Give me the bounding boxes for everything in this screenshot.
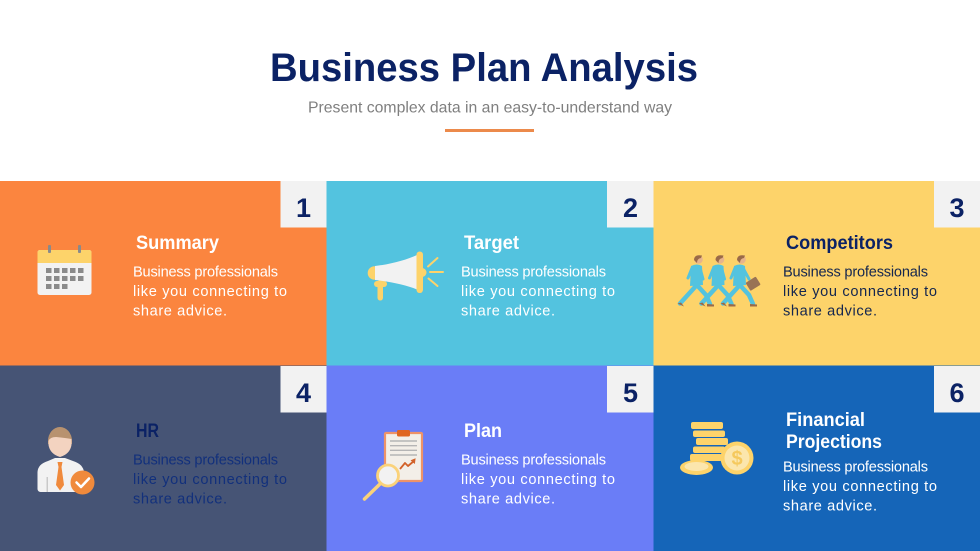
number badge 4: 4	[296, 378, 311, 408]
panel background	[0, 366, 326, 551]
body text	[783, 460, 937, 514]
number badge 1: 1	[296, 193, 311, 223]
number badge 2	[607, 181, 654, 228]
accent rule	[445, 129, 534, 132]
panel 4: hr	[0, 366, 326, 551]
subtitle: Present complex data in an easy-to-understand way	[308, 100, 672, 116]
body text: share advice.	[133, 492, 227, 508]
icon: calendar	[38, 245, 92, 295]
title: Business Plan Analysis	[270, 46, 698, 90]
number badge 6	[934, 366, 980, 412]
panel background	[0, 181, 326, 366]
panel background	[326, 181, 654, 366]
body text	[133, 264, 287, 320]
icon: coins	[680, 422, 754, 475]
panel 1: summary	[0, 181, 326, 366]
icon: clipboard and magnifier	[364, 430, 422, 499]
body text	[461, 452, 615, 508]
heading: Plan	[464, 421, 502, 442]
heading: Summary	[136, 233, 219, 254]
body text: share advice.	[783, 304, 877, 320]
body text: share advice.	[133, 304, 227, 320]
body text: Business professionals	[133, 452, 278, 468]
icon: employee with check badge	[38, 427, 94, 494]
body text: like you connecting to	[133, 472, 287, 488]
body text: share advice.	[783, 498, 877, 514]
body text: like you connecting to	[783, 479, 937, 495]
walker 2	[699, 255, 736, 306]
body text	[461, 264, 615, 320]
body text: Business professionals	[783, 264, 928, 280]
body text: share advice.	[461, 304, 555, 320]
icon: megaphone	[368, 252, 443, 300]
body text: like you connecting to	[133, 284, 287, 300]
body text: Business professionals	[783, 460, 928, 476]
body text	[133, 452, 287, 508]
panel background	[654, 181, 980, 366]
number badge 6: 6	[949, 378, 965, 408]
heading: Projections	[786, 432, 882, 453]
panel 2: target	[326, 181, 654, 366]
number badge 2: 2	[623, 193, 638, 223]
panel background	[654, 366, 980, 551]
heading: Competitors	[786, 233, 893, 254]
heading	[786, 410, 882, 453]
number badge 3	[934, 181, 980, 228]
number badge 1	[280, 181, 326, 228]
body text	[783, 264, 937, 320]
body text: Business professionals	[461, 264, 606, 280]
panel 3: competitors	[654, 181, 980, 366]
body text: like you connecting to	[461, 284, 615, 300]
body text: like you connecting to	[783, 284, 937, 300]
body text: share advice.	[461, 492, 555, 508]
number badge 5: 5	[623, 378, 638, 408]
body text: Business professionals	[133, 264, 278, 280]
header block	[270, 46, 698, 132]
panel 6: financial projections	[654, 366, 980, 551]
number badge 3: 3	[949, 193, 965, 223]
walker 3 with briefcase	[720, 255, 761, 306]
panel background	[326, 366, 654, 551]
number badge 4	[280, 366, 326, 412]
heading: Financial	[786, 410, 865, 431]
body text: like you connecting to	[461, 472, 615, 488]
number badge 5	[607, 366, 654, 412]
icon: walking business people	[678, 255, 761, 306]
panel 5: plan	[326, 366, 654, 551]
heading: HR	[136, 421, 159, 442]
icon: coins: $	[731, 448, 743, 470]
body text: Business professionals	[461, 452, 606, 468]
heading: Target	[464, 233, 520, 254]
walker 1	[678, 255, 714, 306]
